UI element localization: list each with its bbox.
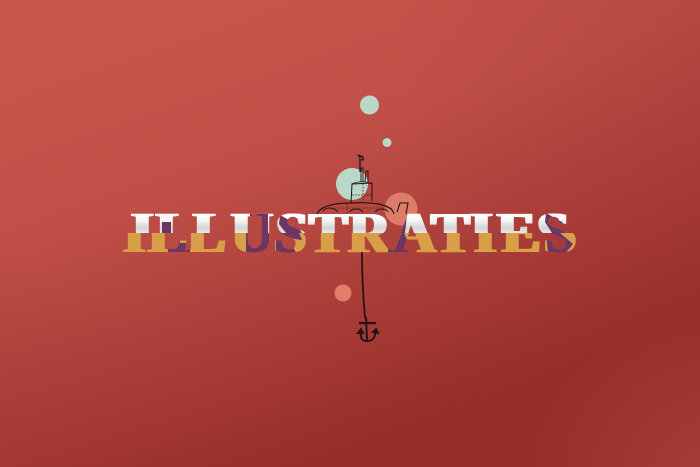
bubble: mint behind submarine — [336, 168, 368, 200]
icon: anchor — [358, 317, 378, 341]
title layer: purple overlay lower: ILLUSTRATIES — [123, 200, 576, 265]
bubble: salmon lower — [334, 284, 352, 302]
title layer: purple overlay upper: ILLUSTRATIES — [131, 200, 569, 265]
bubble: salmon behind submarine — [384, 192, 418, 226]
bubble: small mint — [382, 138, 392, 147]
icon: anchor rope — [362, 252, 365, 318]
title layer: silver upper half: ILLUSTRATIES — [131, 200, 569, 265]
icon: submarine — [317, 155, 408, 214]
title: ILLUSTRATIES — [123, 214, 576, 252]
title layer: gold lower half: ILLUSTRATIES — [123, 200, 576, 265]
bubble: large mint — [360, 96, 379, 114]
